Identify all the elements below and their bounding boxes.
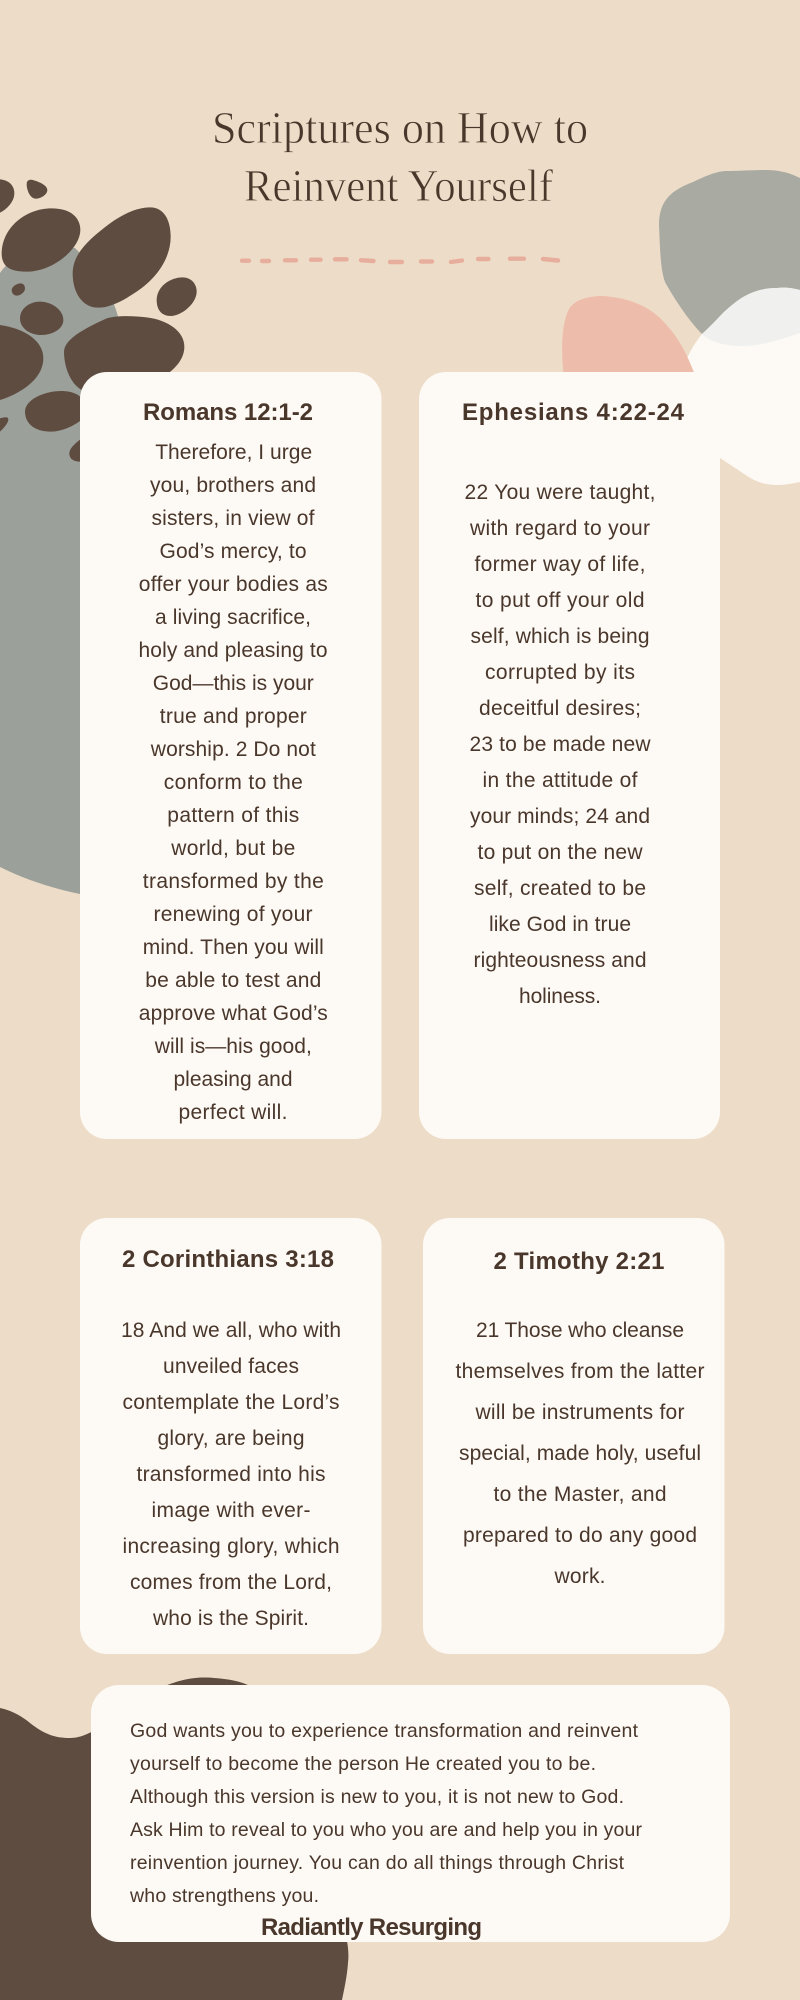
body: Timothy: will be instruments for — [474, 1401, 684, 1424]
decoration: brown blob bottom — [0, 1678, 348, 2000]
body: Corinthians: increasing glory, which — [122, 1535, 340, 1558]
body: Corinthians — [121, 1319, 341, 1630]
card: Romans 12:1-2 — [80, 372, 382, 1139]
body: Romans: sisters, in view of — [152, 507, 315, 530]
card: 2 Corinthians 3:18 — [80, 1218, 382, 1654]
body: Timothy: special, made holy, useful — [459, 1442, 701, 1465]
body: Ephesians: former way of life, — [474, 553, 646, 576]
body: closing message — [129, 1720, 642, 1907]
body: Timothy: to the Master, and — [494, 1483, 666, 1506]
body: Corinthians: contemplate the Lord’s — [122, 1391, 340, 1414]
title — [212, 103, 588, 211]
body: Ephesians: self, which is being — [470, 625, 650, 648]
body: closing message: yourself to become the person He created you to be. — [130, 1753, 596, 1775]
body: Romans: approve what God’s — [139, 1002, 328, 1025]
body: Ephesians: your minds; 24 and — [470, 805, 650, 828]
body: Romans: God—this is your — [153, 672, 314, 695]
decoration: pink blob — [562, 296, 697, 380]
heading: Ephesians: Ephesians 4:22-24 — [462, 399, 685, 426]
body: Romans: conform to the — [164, 771, 303, 794]
body: closing message: who strengthens you. — [129, 1885, 319, 1907]
decoration: sage blob left — [0, 246, 130, 900]
body: Romans: Therefore, I urge — [155, 441, 312, 464]
heading: Timothy: 2 Timothy 2:21 — [494, 1248, 664, 1275]
body: Timothy — [456, 1319, 704, 1588]
body: Timothy: 21 Those who cleanse — [476, 1319, 684, 1342]
body: Romans: God’s mercy, to — [160, 540, 306, 563]
body: Corinthians: comes from the Lord, — [130, 1571, 332, 1594]
decoration: brown pebbles left — [0, 179, 197, 462]
body: Corinthians: glory, are being — [158, 1427, 304, 1450]
body: Timothy: prepared to do any good — [463, 1524, 697, 1547]
body: Romans: a living sacrifice, — [155, 606, 311, 629]
body: Ephesians: self, created to be — [474, 877, 646, 900]
decoration: cream blob right — [682, 288, 800, 485]
body: Romans: be able to test and — [145, 969, 321, 992]
body: Ephesians: with regard to your — [469, 517, 650, 540]
card: closing message — [91, 1685, 730, 1942]
body: Ephesians: to put on the new — [478, 841, 643, 864]
body: Romans: perfect will. — [178, 1101, 288, 1124]
body: Timothy: themselves from the latter — [456, 1360, 704, 1383]
body: Corinthians: unveiled faces — [163, 1355, 299, 1378]
body: Romans: holy and pleasing to — [138, 639, 328, 662]
body: Ephesians: in the attitude of — [482, 769, 638, 792]
body: closing message: reinvention journey. You can do all things through Christ — [130, 1852, 625, 1874]
body: Corinthians: who is the Spirit. — [152, 1607, 309, 1630]
body: Ephesians: corrupted by its — [485, 661, 635, 684]
body: Ephesians: to put off your old — [476, 589, 644, 612]
body: Romans: will is—his good, — [154, 1035, 312, 1058]
brand name: Radiantly Resurging — [261, 1914, 482, 1941]
body: Romans: true and proper — [160, 705, 307, 728]
body: Romans: renewing of your — [154, 903, 312, 926]
body: Ephesians — [464, 481, 656, 1008]
body: Romans: world, but be — [170, 837, 295, 860]
body: Romans — [138, 441, 328, 1124]
decoration: blob overlap — [702, 288, 800, 346]
decoration: gray blob right — [659, 170, 800, 346]
body: Romans: you, brothers and — [150, 474, 316, 497]
card: Ephesians 4:22-24 — [419, 372, 720, 1139]
body: Ephesians: holiness. — [519, 985, 601, 1008]
heading: Corinthians: 2 Corinthians 3:18 — [122, 1246, 334, 1273]
dashed divider — [242, 259, 558, 262]
title: Scriptures on How to — [212, 103, 588, 153]
body: closing message: God wants you to experience transformation and reinvent — [130, 1720, 639, 1742]
body: Ephesians: deceitful desires; — [479, 697, 641, 720]
body: Ephesians: righteousness and — [474, 949, 646, 972]
body: Romans: pleasing and — [174, 1068, 292, 1091]
body: Timothy: work. — [554, 1565, 606, 1588]
body: Romans: transformed by the — [143, 870, 324, 893]
title: Reinvent Yourself — [244, 161, 553, 211]
body: Romans: worship. 2 Do not — [150, 738, 316, 761]
body: Romans: mind. Then you will — [143, 936, 324, 959]
body: Ephesians: like God in true — [489, 913, 631, 936]
heading: Romans: Romans 12:1-2 — [143, 399, 313, 426]
body: Ephesians: 22 You were taught, — [464, 481, 656, 504]
body: Corinthians: transformed into his — [136, 1463, 326, 1486]
body: Ephesians: 23 to be made new — [470, 733, 651, 756]
body: Corinthians: 18 And we all, who with — [121, 1319, 341, 1342]
body: closing message: Although this version is new to you, it is not new to God. — [130, 1786, 624, 1808]
body: Romans: pattern of this — [167, 804, 299, 827]
body: Romans: offer your bodies as — [139, 573, 328, 596]
card: 2 Timothy 2:21 — [423, 1218, 724, 1654]
body: Corinthians: image with ever- — [152, 1499, 310, 1522]
body: closing message: Ask Him to reveal to you who you are and help you in your — [130, 1819, 642, 1841]
